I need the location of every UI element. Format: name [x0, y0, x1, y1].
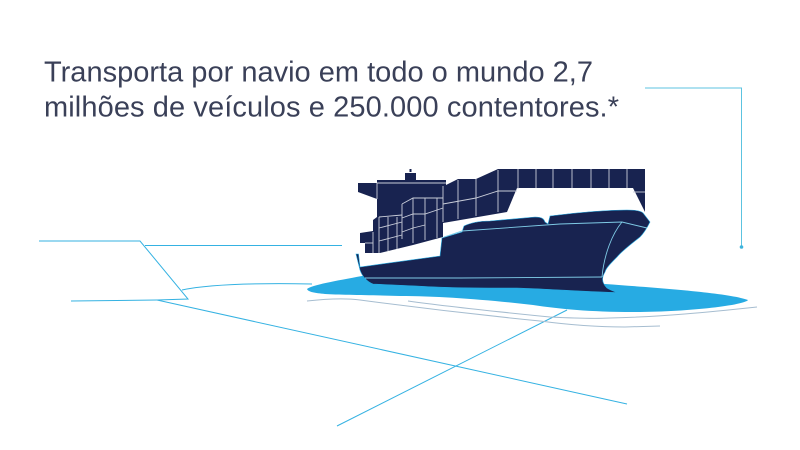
- water patch: [307, 276, 748, 312]
- callout leader line with dot: [645, 88, 743, 249]
- heading text: Transporta por navio em todo o mundo 2,7: [44, 56, 593, 88]
- funnel: [405, 169, 416, 180]
- container grid lines: [365, 169, 645, 253]
- perspective lines: dock and sea: [39, 241, 627, 426]
- hull: [356, 210, 650, 292]
- wake lines: [307, 299, 757, 327]
- ship: [356, 169, 650, 292]
- hull detail lines: [365, 222, 647, 278]
- heading text: milhões de veículos e 250.000 contentores.*: [44, 92, 619, 124]
- cargo containers and bridge: [358, 169, 645, 253]
- heading text: [44, 56, 619, 124]
